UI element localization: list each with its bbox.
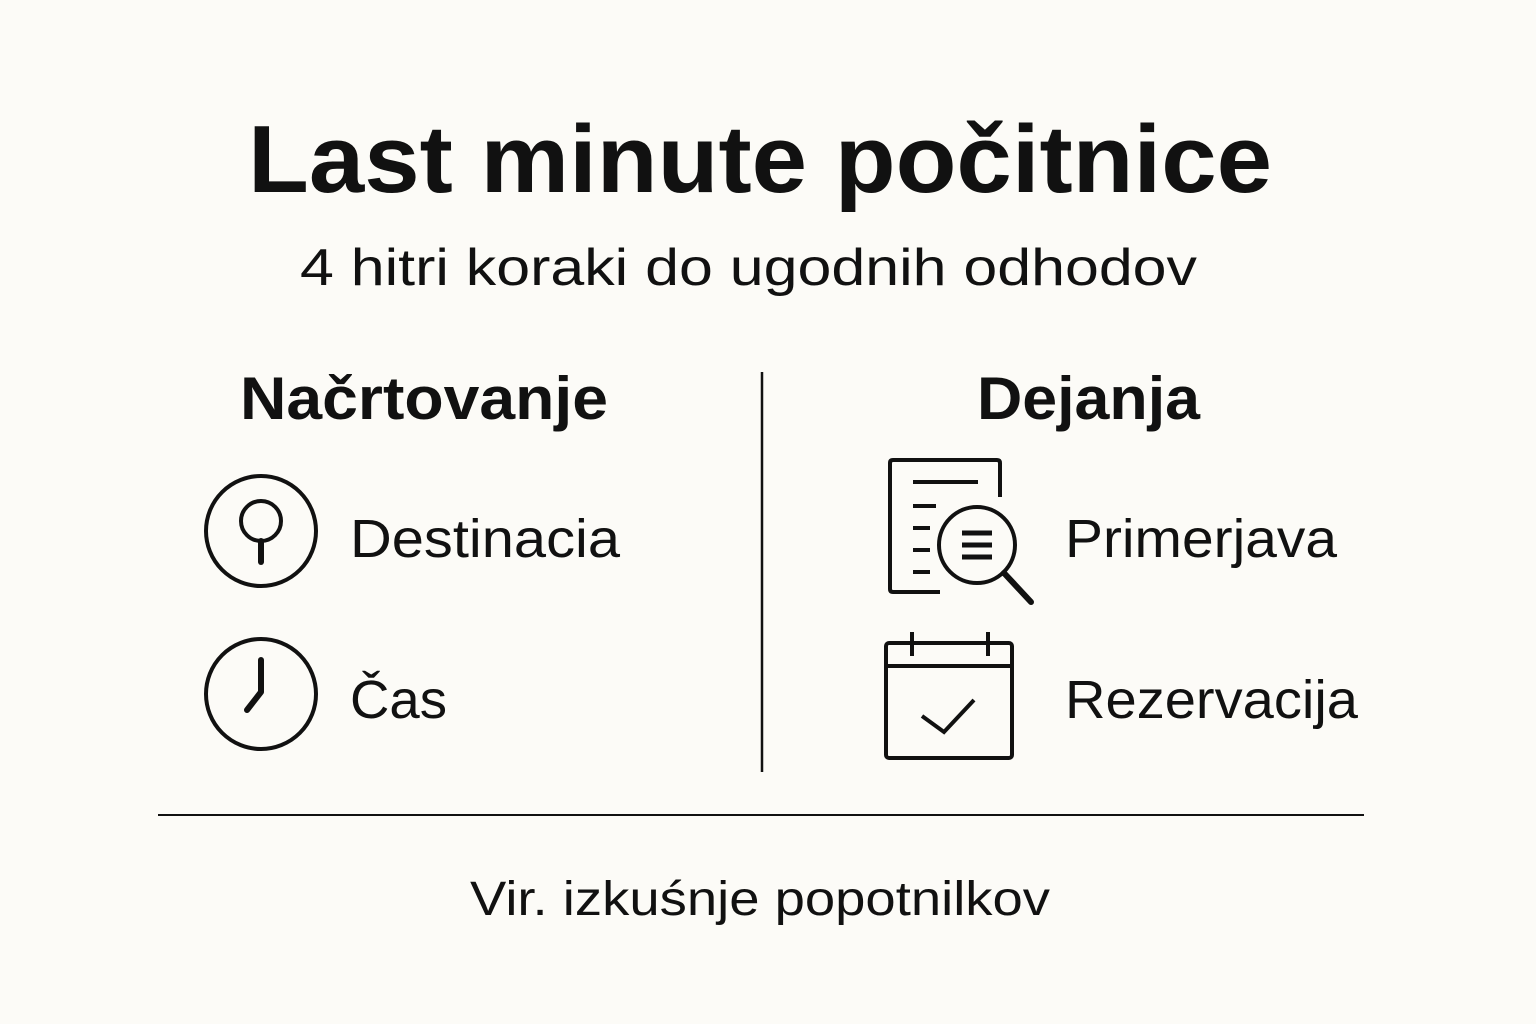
item: Rezervacija: Rezervacija [1065,670,1359,730]
item: Čas: Čas [350,670,447,730]
item: Destinacia: Destinacia [350,509,621,569]
heading: Dejanja: Dejanja [977,365,1201,432]
icon: document with magnifier [890,460,1031,602]
subtitle: 4 hitri koraki do ugodnih odhodov [300,239,1197,297]
title: Last minute počitnice [248,106,1272,213]
icon: location pin [206,476,316,586]
item: Primerjava: Primerjava [1065,509,1338,569]
heading: Načrtovanje: Načrtovanje [240,365,608,432]
icon: clock [206,639,316,749]
icon: calendar with check [886,632,1012,758]
footer source: Vir. izkuśnje popotnilkov [470,873,1050,926]
